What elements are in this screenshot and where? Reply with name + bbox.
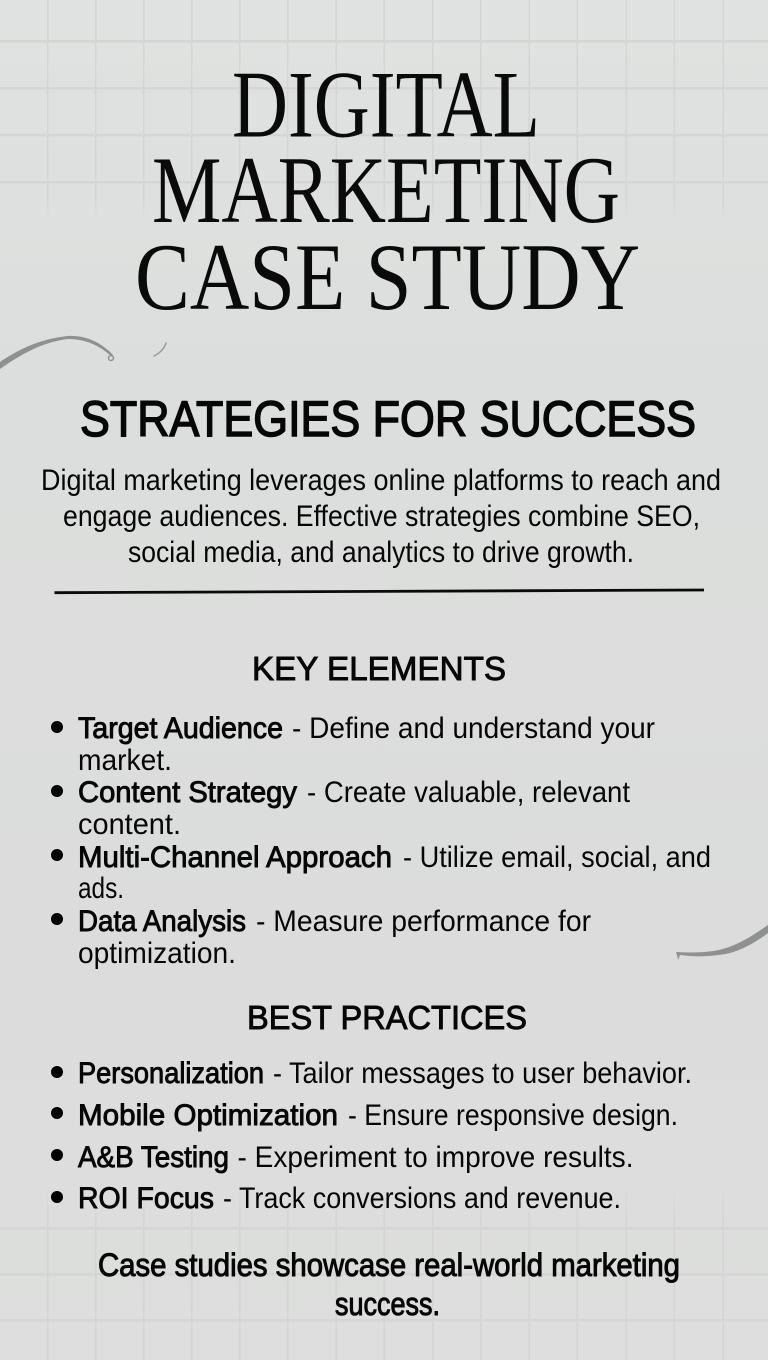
item: Personalization: - Tailor messages to user behavior. — [273, 1057, 692, 1090]
item: Mobile Optimization — [51, 1099, 678, 1132]
heading: Key Elements: KEY ELEMENTS — [252, 650, 506, 687]
closing statement — [98, 1247, 680, 1322]
item: Personalization: Personalization — [78, 1057, 264, 1090]
closing statement: Case studies showcase real-world marketing — [98, 1247, 680, 1283]
title: Digital Marketing Case Study: DIGITAL — [232, 52, 540, 158]
item: Data Analysis: optimization. — [78, 937, 236, 970]
intro paragraph: social media, and analytics to drive growth. — [128, 536, 634, 569]
item: Target Audience: Target Audience — [78, 712, 283, 745]
item: Multi-Channel Approach: ads. — [78, 872, 124, 905]
closing statement: success. — [335, 1286, 440, 1322]
title: Digital Marketing Case Study — [135, 52, 640, 330]
item: Content Strategy: - Create valuable, relevant — [307, 776, 631, 809]
intro paragraph: engage audiences. Effective strategies combine SEO, — [63, 500, 700, 533]
divider rule — [54, 590, 704, 593]
title: Digital Marketing Case Study: MARKETING — [152, 137, 620, 243]
item: ROI Focus — [51, 1182, 621, 1215]
item: Content Strategy: Content Strategy — [78, 776, 297, 809]
list: best practices — [51, 1057, 692, 1215]
intro paragraph — [41, 464, 721, 569]
item: Content Strategy: content. — [78, 808, 181, 841]
item: Multi-Channel Approach: - Utilize email, social, and — [403, 841, 711, 874]
item: Mobile Optimization: Mobile Optimization — [78, 1099, 338, 1132]
item: Target Audience: - Define and understand your — [292, 712, 655, 745]
item: Content Strategy — [51, 776, 631, 841]
item: Multi-Channel Approach — [51, 841, 711, 905]
item: Personalization — [51, 1057, 692, 1090]
heading: Best Practices: BEST PRACTICES — [247, 999, 527, 1036]
item: Data Analysis — [51, 905, 591, 970]
item: Mobile Optimization: - Ensure responsive design. — [348, 1099, 678, 1132]
title: Digital Marketing Case Study: CASE STUDY — [135, 224, 640, 330]
brush stroke: right edge swirl — [676, 925, 768, 960]
item: Target Audience — [51, 712, 655, 777]
list: key elements — [51, 712, 711, 970]
item: Multi-Channel Approach: Multi-Channel Approach — [78, 841, 392, 874]
item: ROI Focus: ROI Focus — [78, 1182, 214, 1215]
item: ROI Focus: - Track conversions and revenue. — [223, 1182, 621, 1215]
heading: Strategies for Success: STRATEGIES FOR SUCCESS — [80, 391, 696, 447]
item: A&B Testing — [51, 1141, 634, 1174]
item: Data Analysis: - Measure performance for — [256, 905, 591, 938]
item: Target Audience: market. — [78, 744, 172, 777]
item: A&B Testing: - Experiment to improve results. — [238, 1141, 634, 1174]
brush stroke: top left swirl — [0, 336, 166, 369]
item: Data Analysis: Data Analysis — [78, 905, 246, 938]
item: A&B Testing: A&B Testing — [78, 1141, 229, 1174]
